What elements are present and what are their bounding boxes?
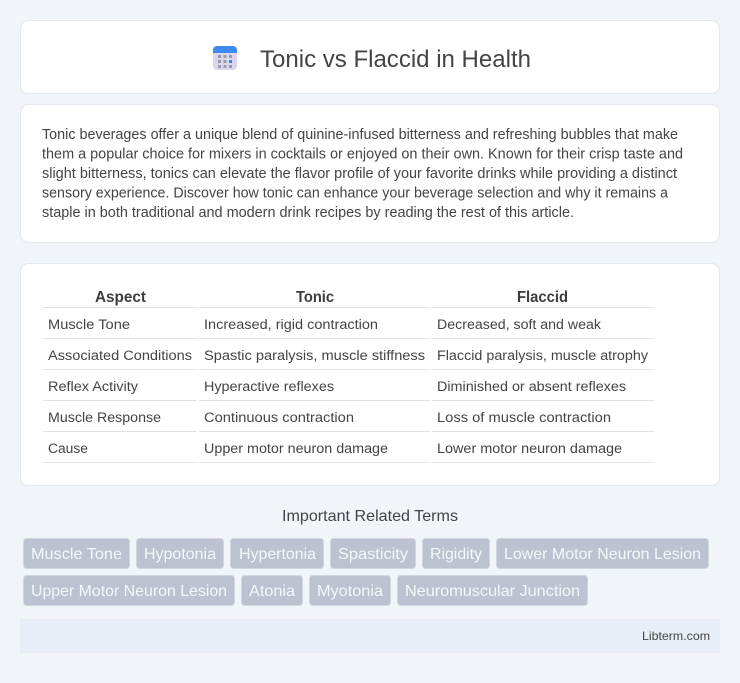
- intro paragraph: slight bitterness, tonics can elevate the flavor profile of your favorite drinks while providing a distinct: [42, 166, 677, 182]
- row: cause: Cause: [48, 441, 88, 457]
- related term tags: Upper Motor Neuron Lesion: [31, 583, 227, 600]
- panel: intro text: [20, 104, 720, 242]
- footer: [20, 619, 720, 653]
- related term tags: Rigidity: [430, 546, 482, 563]
- row: associated conditions: [48, 348, 649, 364]
- table header: Flaccid: [517, 289, 568, 306]
- row: muscle tone: Decreased, soft and weak: [437, 317, 602, 333]
- related term tags: Spasticity: [338, 546, 408, 563]
- related term tags: Hypotonia: [144, 546, 216, 563]
- row: associated conditions: Flaccid paralysis, muscle atrophy: [437, 348, 649, 364]
- row: muscle response: Muscle Response: [48, 410, 161, 426]
- intro paragraph: them a popular choice for mixers in cocktails or enjoyed on their own. Known for their crisp taste and: [42, 146, 683, 162]
- table header: Aspect: [95, 289, 147, 306]
- row: muscle response: [48, 410, 611, 426]
- row: muscle response: Loss of muscle contraction: [437, 410, 611, 426]
- row: cause: [48, 441, 622, 457]
- related term tags: Lower Motor Neuron Lesion: [504, 546, 701, 563]
- table header: [95, 289, 568, 306]
- header panel: [20, 20, 720, 94]
- row: cause: Upper motor neuron damage: [204, 441, 388, 457]
- row: cause: Lower motor neuron damage: [437, 441, 622, 457]
- related term tags: Hypertonia: [239, 546, 316, 563]
- row: muscle tone: [48, 317, 602, 333]
- panel: comparison table: [20, 264, 720, 486]
- row: reflex activity: [48, 379, 626, 395]
- row: reflex activity: Hyperactive reflexes: [204, 379, 334, 395]
- related term tags: [24, 538, 708, 606]
- row: muscle tone: Increased, rigid contraction: [204, 317, 378, 333]
- row: reflex activity: Diminished or absent reflexes: [437, 379, 626, 395]
- intro paragraph: sensory experience. Discover how tonic can enhance your beverage selection and why it remains a: [42, 186, 669, 202]
- row: associated conditions: Spastic paralysis, muscle stiffness: [204, 348, 425, 364]
- intro paragraph: [42, 127, 683, 221]
- row: reflex activity: Reflex Activity: [48, 379, 139, 395]
- table header: Tonic: [296, 289, 334, 306]
- icon: calendar: [213, 46, 237, 70]
- related term tags: Neuromuscular Junction: [405, 583, 580, 600]
- related term tags: Myotonia: [317, 583, 383, 600]
- related term tags: Muscle Tone: [31, 546, 122, 563]
- related term tags: Atonia: [249, 583, 295, 600]
- intro paragraph: Tonic beverages offer a unique blend of quinine-infused bitterness and refreshing bubbles that make: [42, 127, 678, 143]
- heading: related terms: Important Related Terms: [282, 508, 458, 525]
- row: muscle tone: Muscle Tone: [48, 317, 130, 333]
- footer source: Libterm.com: [642, 629, 710, 643]
- intro paragraph: staple in both traditional and modern drink recipes by reading the rest of this article.: [42, 205, 574, 221]
- row: muscle response: Continuous contraction: [204, 410, 354, 426]
- row: associated conditions: Associated Conditions: [48, 348, 192, 364]
- title: Tonic vs Flaccid in Health: [260, 46, 531, 73]
